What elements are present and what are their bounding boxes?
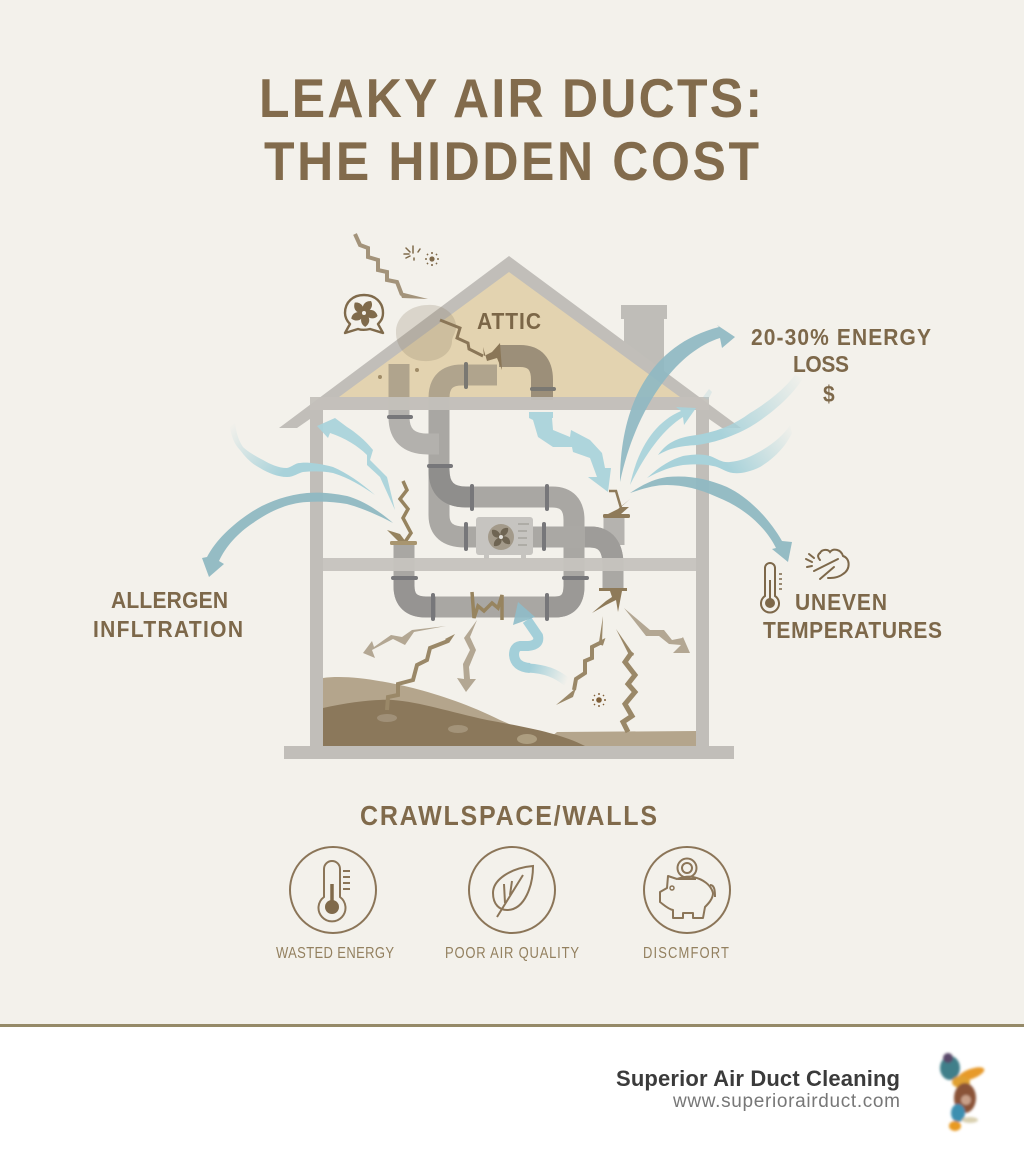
- arrow: brown right: [624, 608, 690, 653]
- callout: uneven temperatures: [761, 550, 942, 643]
- middle floor: [323, 558, 696, 571]
- foundation slab: [284, 746, 734, 759]
- title: [259, 69, 762, 193]
- crack: lower duct: [472, 592, 502, 620]
- crack: right lower pipe: [592, 588, 627, 613]
- attic dust specks: [378, 368, 419, 379]
- crack: attic duct: [440, 320, 502, 370]
- crack: above roof: [355, 234, 428, 299]
- icon: discomfort: [643, 847, 730, 962]
- footer company name: Superior Air Duct Cleaning: [616, 1066, 900, 1091]
- callout: allergen infiltration: [93, 587, 243, 642]
- crawlspace label: CRAWLSPACE/WALLS: [360, 800, 657, 831]
- chimney: [621, 305, 667, 390]
- house illustration: [279, 256, 741, 759]
- swoosh: left fading: [230, 423, 375, 495]
- icon: thermometer small: [761, 563, 782, 612]
- duct flanges: [389, 364, 587, 619]
- icon: discomfort: DISCMFORT: [643, 945, 729, 962]
- cracks and leak zigzags: [355, 234, 690, 732]
- dust speck crawlspace: [592, 693, 606, 707]
- swoosh: middle right fading: [647, 425, 792, 478]
- icon: wasted energy: WASTED ENERGY: [276, 945, 394, 962]
- icon: wasted energy: [276, 847, 394, 962]
- crack: right pipe: [603, 491, 630, 518]
- title: THE HIDDEN COST: [264, 132, 759, 193]
- arrow: up right short: [630, 407, 696, 485]
- attic label: ATTIC: [477, 308, 541, 334]
- crack: crawlspace right two: [616, 629, 635, 732]
- ceiling beam: [310, 397, 709, 410]
- icon: poor air quality: [445, 847, 579, 962]
- callout: energy loss: [751, 324, 931, 407]
- attic duct sections: [399, 356, 542, 400]
- dust specks near roof: [404, 246, 439, 266]
- swoosh: upper right fading: [658, 375, 803, 455]
- roof: [279, 256, 741, 428]
- icon row: [276, 847, 730, 962]
- arrow: brown down: [457, 620, 477, 692]
- arrow: to uneven temperatures: [630, 476, 792, 562]
- crack: left pipe: [387, 481, 417, 545]
- attic space: [339, 272, 680, 397]
- icon: wind cloud: [806, 550, 849, 579]
- arrow: crawlspace air entering duct: [513, 602, 567, 682]
- callout: uneven temperatures: UNEVEN: [795, 589, 887, 615]
- footer url: www.superiorairduct.com: [672, 1091, 900, 1112]
- crack: crawlspace left: [387, 634, 455, 710]
- callout: allergen infiltration: ALLERGEN: [111, 587, 228, 613]
- title: LEAKY AIR DUCTS:: [259, 69, 762, 130]
- dust cloud: [396, 305, 456, 361]
- arrow: duct outlet to right crack: [529, 412, 611, 492]
- arrow: brown left: [363, 626, 446, 658]
- callout: energy loss: LOSS: [793, 351, 849, 377]
- crack: crawlspace right one: [556, 616, 603, 705]
- icon: mascot: [940, 1053, 986, 1131]
- main duct loop: [399, 398, 614, 607]
- faint air wisp: [703, 389, 712, 400]
- callout: uneven temperatures: TEMPERATURES: [763, 617, 942, 643]
- callout: energy loss: $: [823, 381, 835, 407]
- air flow arrows: [202, 325, 803, 682]
- icon: fan bubble: [345, 295, 383, 333]
- walls: [310, 410, 709, 750]
- arrow: left crack up to wall: [317, 418, 395, 510]
- arrow: up to energy loss: [620, 325, 735, 482]
- callout: allergen infiltration: INFLTRATION: [93, 616, 243, 642]
- icon: poor air quality: POOR AIR QUALITY: [445, 945, 579, 962]
- footer band: [0, 1024, 1024, 1154]
- crawlspace ground: [323, 677, 696, 746]
- callout: energy loss: 20-30% ENERGY: [751, 324, 931, 350]
- air handler unit: [476, 517, 533, 559]
- arrow: to allergen infiltration: [202, 493, 393, 577]
